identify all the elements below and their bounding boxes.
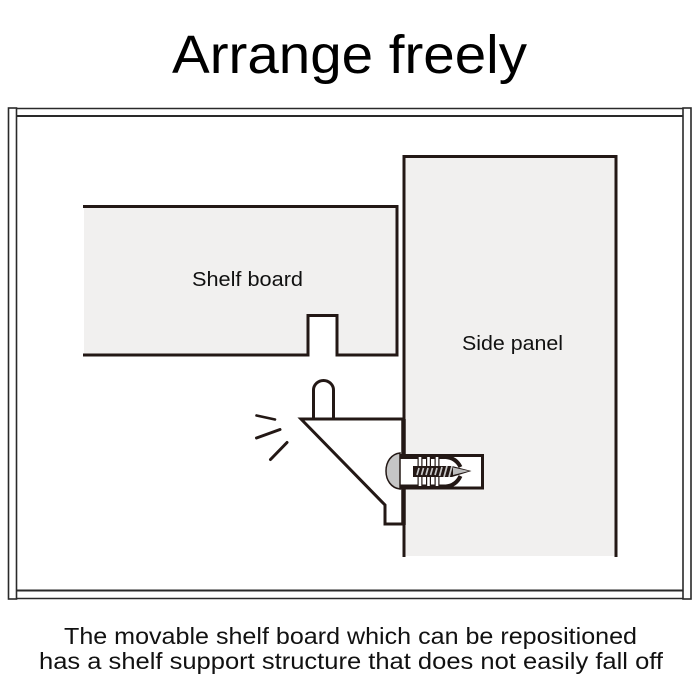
- caption: has a shelf support structure that does not easily fall off: [39, 648, 664, 674]
- label: shelf board: Shelf board: [192, 268, 303, 291]
- icon: screw head: [386, 453, 400, 489]
- panel: side panel: [404, 156, 616, 557]
- shelf support bracket: [301, 380, 404, 525]
- panel: shelf board: [83, 206, 397, 355]
- caption: [39, 623, 664, 674]
- panel: cabinet frame: [8, 108, 691, 599]
- icon: screw shaft: [413, 466, 472, 477]
- icon: anchor ribs: [420, 456, 437, 487]
- icon: screw anchor: [400, 457, 460, 486]
- support peg: [314, 380, 334, 419]
- icon: click marks: [256, 416, 287, 460]
- caption: The movable shelf board which can be repositioned: [64, 623, 637, 649]
- title: Arrange freely: [172, 25, 527, 85]
- screw housing in side panel: [386, 453, 483, 489]
- label: side panel: Side panel: [462, 332, 563, 355]
- bracket outline: [301, 419, 403, 524]
